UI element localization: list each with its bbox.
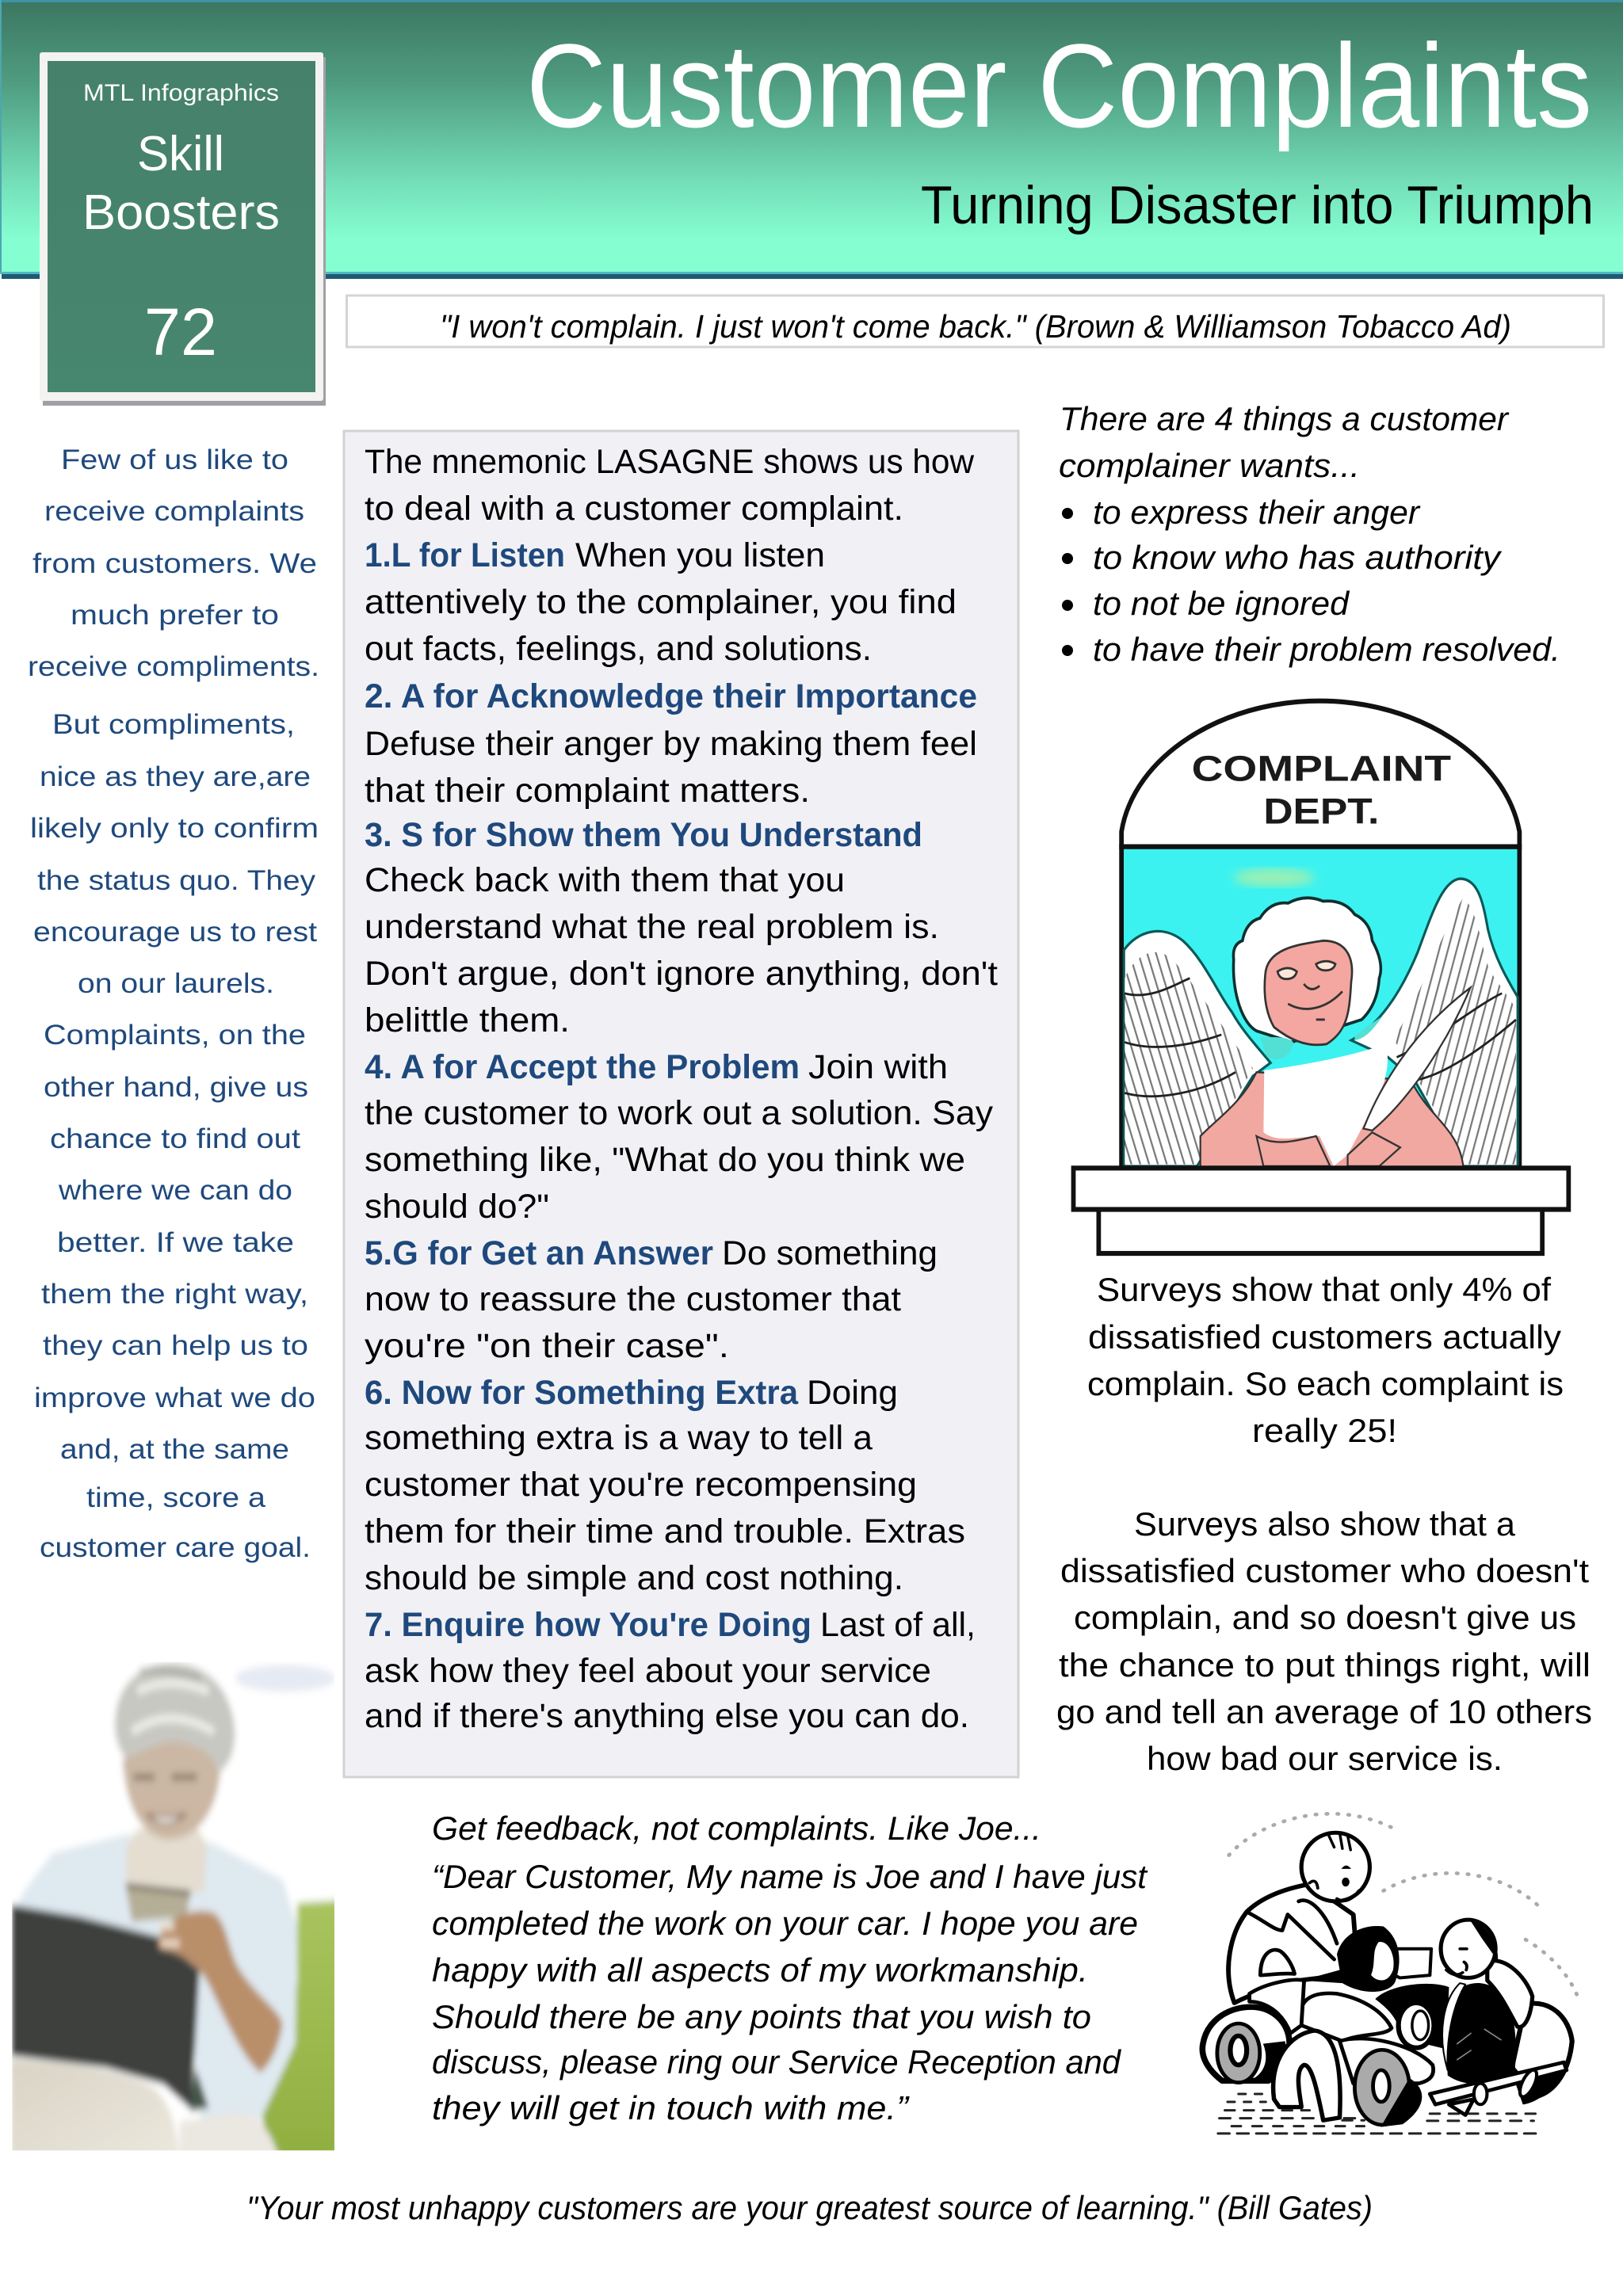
- left column intro text: improve what we do: [34, 1383, 315, 1413]
- text: survey statistics: complain. So each complaint is: [1087, 1365, 1564, 1402]
- front fender: [1339, 2039, 1434, 2084]
- exhaust dots: [1229, 1814, 1578, 1997]
- paper: [1263, 1044, 1388, 1166]
- step 3: Show you understand: Check back with them that you: [365, 861, 845, 899]
- text: Joe feedback note: “Dear Customer, My name is Joe and I have just: [432, 1858, 1148, 1895]
- text: survey statistics: really 25!: [1252, 1412, 1397, 1449]
- left column intro text: them the right way,: [41, 1279, 308, 1310]
- left column intro text: they can help us to: [43, 1330, 308, 1361]
- step 4: Accept the problem: something like, "What do you think we: [365, 1141, 965, 1179]
- man in suit: [1228, 1884, 1356, 2003]
- list: what a complainer wants: to not be ignored: [1093, 585, 1350, 622]
- intro text: The mnemonic LASAGNE shows us how: [365, 443, 975, 481]
- text: survey statistics: complain, and so doesn't give us: [1074, 1599, 1576, 1636]
- man with black suit: [1445, 1983, 1516, 2084]
- top quote box: "I won't complain. I just won't come back." (Brown & Williamson Tobacco Ad): [440, 308, 1511, 345]
- body and arms: [1201, 1072, 1464, 1168]
- step 1: Listen: attentively to the complainer, you find: [365, 583, 957, 621]
- text: survey statistics: dissatisfied customers actually: [1088, 1318, 1561, 1356]
- header banner: [0, 0, 1623, 279]
- step 7: Enquire: 7. Enquire how You're Doing: [365, 1606, 812, 1644]
- step 6: Something extra: Doing: [807, 1374, 898, 1412]
- step 5: Get an answer: 5.G for Get an Answer: [365, 1234, 713, 1272]
- car body: [1342, 1949, 1431, 1978]
- left column intro text: much prefer to: [71, 600, 279, 631]
- left column intro text: encourage us to rest: [33, 917, 317, 948]
- text: survey statistics: Surveys also show that a: [1134, 1505, 1516, 1543]
- list: what a complainer wants: to know who has authority: [1093, 539, 1503, 576]
- step 6: Something extra: should be simple and cost nothing.: [365, 1559, 903, 1597]
- text: survey statistics: [1056, 1271, 1592, 1777]
- list: what a complainer wants: complainer wants...: [1059, 447, 1360, 484]
- left column intro text: and, at the same: [60, 1434, 289, 1465]
- illustration: mechanics at a car: [1202, 1814, 1578, 2134]
- step 3: Show you understand: 3. S for Show them You Understand: [365, 816, 922, 854]
- left column intro text: nice as they are,are: [40, 761, 311, 792]
- subtitle: Turning Disaster into Triumph: [921, 175, 1594, 235]
- label: complaint dept: [1192, 749, 1451, 832]
- teal collar: [1260, 1016, 1383, 1059]
- series badge: Skill Boosters 72: Skill: [137, 127, 224, 181]
- step 1: Listen: When you listen: [575, 536, 825, 574]
- step 6: Something extra: [365, 1374, 965, 1597]
- left column intro text: the status quo. They: [37, 865, 316, 896]
- left column intro text: time, score a: [86, 1482, 266, 1513]
- text: Joe feedback note: discuss, please ring our Service Reception and: [432, 2043, 1122, 2081]
- wings: [1124, 879, 1518, 1166]
- series badge: Skill Boosters 72: 72: [144, 295, 217, 369]
- tool roll: [1430, 2062, 1567, 2115]
- step 6: Something extra: 6. Now for Something Extra: [365, 1374, 799, 1412]
- top quote box: [347, 296, 1604, 347]
- panel: LASAGNE mnemonic: [344, 431, 1018, 1777]
- step 3: Show you understand: [365, 816, 998, 1039]
- radiator: [1399, 2003, 1434, 2048]
- label: complaint dept: DEPT.: [1263, 791, 1379, 832]
- text: Joe feedback note: Get feedback, not complaints. Like Joe...: [432, 1810, 1041, 1847]
- series badge: Skill Boosters 72: Boosters: [82, 185, 280, 240]
- step 4: Accept the problem: [365, 1048, 994, 1226]
- dark-suited man under bonnet: [1301, 1926, 1400, 1992]
- step 3: Show you understand: understand what the real problem is.: [365, 908, 939, 946]
- text: survey statistics: dissatisfied customer who doesn't: [1060, 1552, 1589, 1589]
- photo: woman with laptop and card: [12, 1662, 334, 2150]
- bottom quote: "Your most unhappy customers are your greatest source of learning." (Bill Gates): [246, 2189, 1373, 2226]
- step 1: Listen: [365, 536, 957, 668]
- text: survey statistics: how bad our service is.: [1147, 1740, 1503, 1777]
- step 2: Acknowledge: that their complaint matters.: [365, 772, 810, 810]
- list: what a complainer wants: [1059, 400, 1560, 668]
- step 7: Enquire: [365, 1606, 976, 1735]
- step 5: Get an answer: now to reassure the customer that: [365, 1280, 901, 1318]
- intro text: to deal with a customer complaint.: [365, 490, 903, 528]
- window sill: [1074, 1168, 1568, 1253]
- text: survey statistics: Surveys show that only 4% of: [1097, 1271, 1551, 1308]
- series badge: Skill Boosters 72: [40, 52, 326, 406]
- text: Joe feedback note: happy with all aspects of my workmanship.: [432, 1951, 1088, 1989]
- left column intro text: likely only to confirm: [30, 813, 319, 844]
- step 6: Something extra: something extra is a way to tell a: [365, 1419, 873, 1457]
- text: survey statistics: go and tell an average of 10 others: [1056, 1693, 1592, 1730]
- left column intro text: other hand, give us: [44, 1072, 308, 1103]
- step 4: Accept the problem: 4. A for Accept the Problem: [365, 1048, 800, 1086]
- hair: [1233, 898, 1381, 1042]
- step 5: Get an answer: you're "on their case".: [365, 1327, 729, 1365]
- step 7: Enquire: and if there's anything else you can do.: [365, 1697, 969, 1735]
- halo: [1234, 868, 1315, 887]
- step 3: Show you understand: Don't argue, don't ignore anything, don't: [365, 955, 998, 993]
- illustration: complaint dept angel: [1074, 701, 1568, 1253]
- step 7: Enquire: ask how they feel about your service: [365, 1652, 931, 1690]
- left column intro text: from customers. We: [32, 548, 317, 579]
- step 6: Something extra: customer that you're recompensing: [365, 1466, 917, 1504]
- list: what a complainer wants: to have their problem resolved.: [1093, 631, 1560, 668]
- list: what a complainer wants: to express their anger: [1093, 494, 1421, 531]
- step 6: Something extra: them for their time and trouble. Extras: [365, 1512, 965, 1550]
- step 4: Accept the problem: should do?": [365, 1188, 549, 1226]
- left column intro text: customer care goal.: [40, 1532, 311, 1563]
- left column intro text: better. If we take: [57, 1227, 294, 1258]
- left column intro text: receive compliments.: [28, 651, 319, 682]
- ground dashes: [1218, 2094, 1541, 2134]
- left column intro text: Complaints, on the: [44, 1020, 306, 1051]
- step 7: Enquire: Last of all,: [820, 1606, 976, 1644]
- step 5: Get an answer: Do something: [722, 1234, 938, 1272]
- far fender: [1512, 2004, 1572, 2096]
- step 2: Acknowledge: 2. A for Acknowledge their Importance: [365, 677, 977, 715]
- text: survey statistics: the chance to put things right, will: [1059, 1646, 1591, 1684]
- face: [1265, 940, 1352, 1045]
- step 3: Show you understand: belittle them.: [365, 1001, 570, 1039]
- text: Joe feedback note: they will get in touch with me.”: [432, 2089, 910, 2126]
- text: Joe feedback note: Should there be any points that you wish to: [432, 1998, 1091, 2035]
- text: Joe feedback note: [432, 1810, 1148, 2126]
- left column intro text: But compliments,: [52, 709, 295, 740]
- label: complaint dept: COMPLAINT: [1192, 749, 1451, 789]
- kneeling legs: [1274, 2031, 1340, 2120]
- step 1: Listen: 1.L for Listen: [365, 536, 565, 574]
- left column intro text: Few of us like to: [61, 444, 288, 475]
- intro text: [365, 443, 975, 528]
- left column intro text: receive complaints: [44, 496, 304, 527]
- step 4: Accept the problem: Join with: [808, 1048, 948, 1086]
- left column intro text: on our laurels.: [78, 968, 274, 999]
- step 5: Get an answer: [365, 1234, 938, 1365]
- front wheel: [1354, 2050, 1422, 2127]
- quill and hands: [1363, 988, 1470, 1131]
- text: Joe feedback note: completed the work on your car. I hope you are: [432, 1905, 1138, 1942]
- left column intro text: chance to find out: [50, 1123, 300, 1154]
- step 2: Acknowledge: [365, 677, 977, 810]
- step 4: Accept the problem: the customer to work out a solution. Say: [365, 1094, 994, 1132]
- left column intro text: [28, 444, 319, 1563]
- step 2: Acknowledge: Defuse their anger by making them feel: [365, 725, 977, 763]
- rear fender and wheel: [1202, 2007, 1289, 2084]
- series badge: Skill Boosters 72: MTL Infographics: [83, 80, 279, 106]
- list: what a complainer wants: There are 4 things a customer: [1060, 400, 1510, 437]
- left column intro text: where we can do: [58, 1175, 292, 1206]
- step 1: Listen: out facts, feelings, and solutions.: [365, 630, 872, 668]
